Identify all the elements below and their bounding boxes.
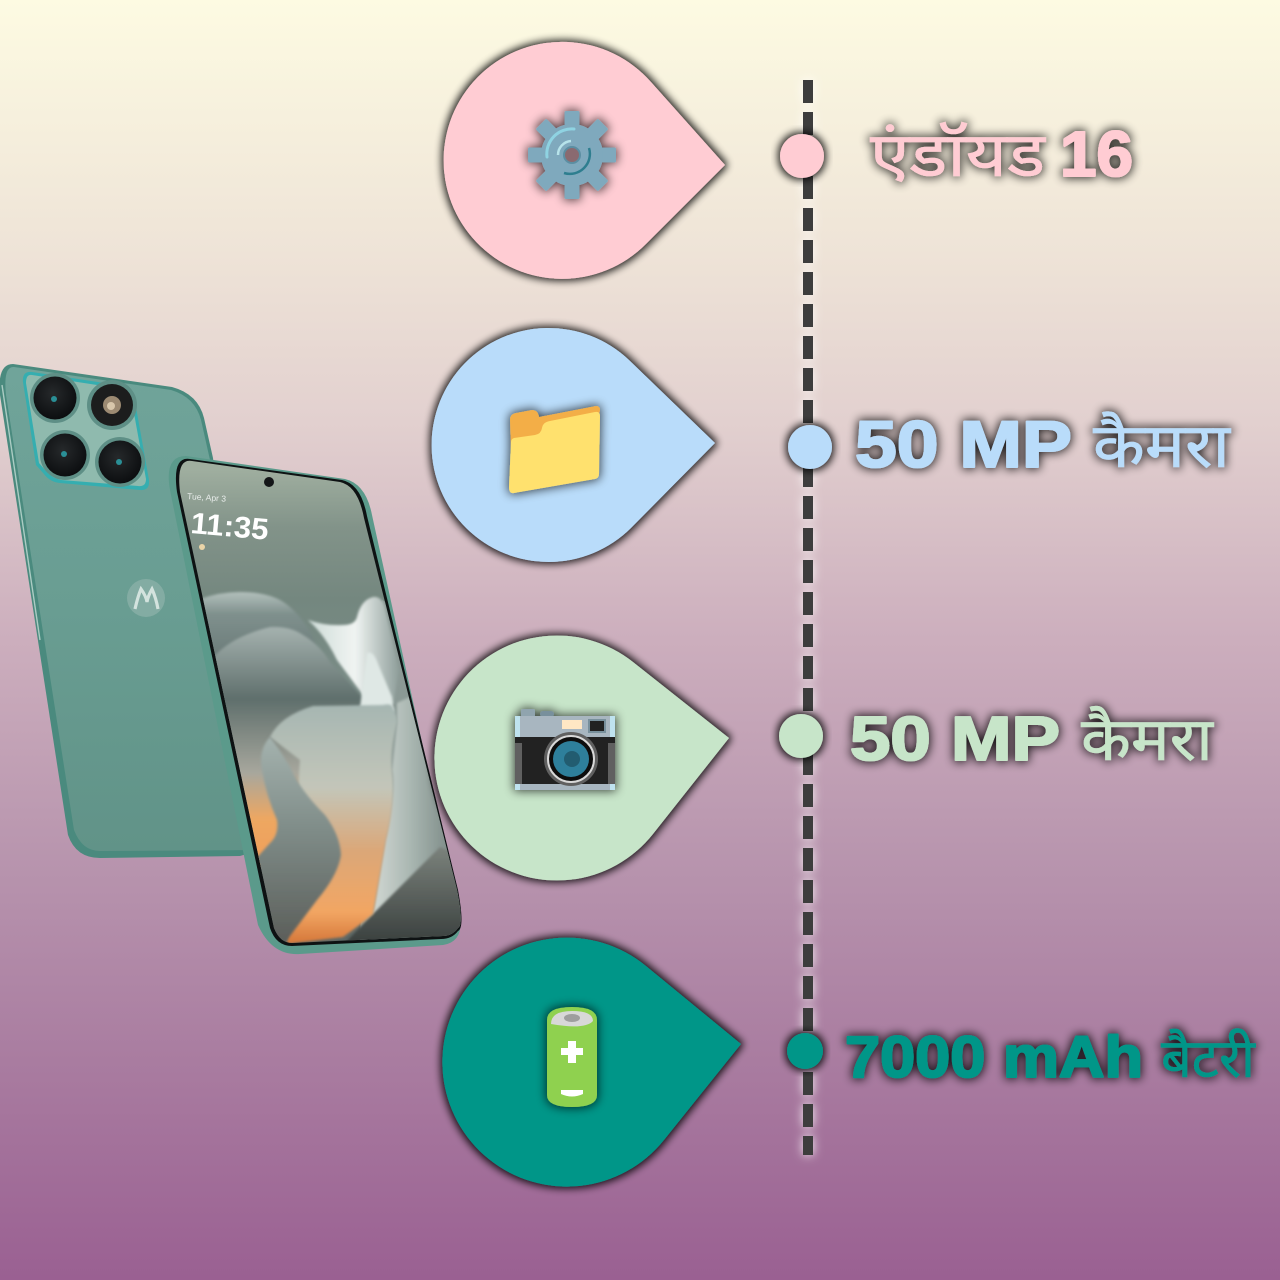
icon: folder — [509, 406, 600, 493]
phone front — [169, 455, 470, 954]
connector dot — [788, 425, 832, 469]
phone screen wallpaper — [170, 455, 470, 950]
label: 7000 mAh battery: बैटरी — [1161, 1027, 1256, 1100]
label: 50 MP camera: कैमरा — [1093, 410, 1231, 493]
weather icon — [199, 544, 205, 550]
label: 50 MP camera: कैमरा — [1081, 706, 1215, 785]
label: 7000 mAh battery: 7000 mAh — [845, 1025, 1143, 1090]
icon: gear — [528, 111, 616, 199]
step 4: battery — [442, 938, 1256, 1187]
label: 7000 mAh battery — [845, 1025, 1256, 1100]
connector dot — [779, 714, 823, 758]
label: android 16: 16 — [1060, 118, 1133, 190]
label: 50 MP camera: 50 MP — [850, 705, 1060, 774]
pointer panel: teal — [442, 938, 741, 1187]
lock screen date: Tue, Apr 3 — [187, 491, 227, 504]
connector dot — [787, 1033, 823, 1069]
phone back — [0, 364, 260, 858]
lock screen time: 11:35 — [189, 507, 270, 547]
pointer panel: blue — [432, 328, 715, 562]
connector dot — [780, 134, 824, 178]
label: 50 MP camera — [850, 705, 1215, 785]
step 2: folder — [432, 328, 1231, 562]
dashed timeline — [803, 80, 813, 1155]
icon: battery — [547, 1007, 597, 1107]
label: 50 MP camera: 50 MP — [855, 407, 1072, 481]
pointer panel: pink — [444, 42, 725, 279]
label: android 16 — [870, 118, 1133, 202]
pointer panel: green — [434, 636, 729, 881]
step 3: camera — [434, 636, 1215, 881]
label: android 16: एंडॉयड — [870, 121, 1046, 202]
icon: camera — [515, 709, 615, 790]
label: 50 MP camera — [855, 407, 1231, 493]
phone product image — [0, 364, 470, 954]
front camera — [264, 477, 274, 487]
step 1: android — [444, 42, 1133, 279]
motorola logo — [127, 579, 165, 617]
camera island — [23, 372, 149, 490]
